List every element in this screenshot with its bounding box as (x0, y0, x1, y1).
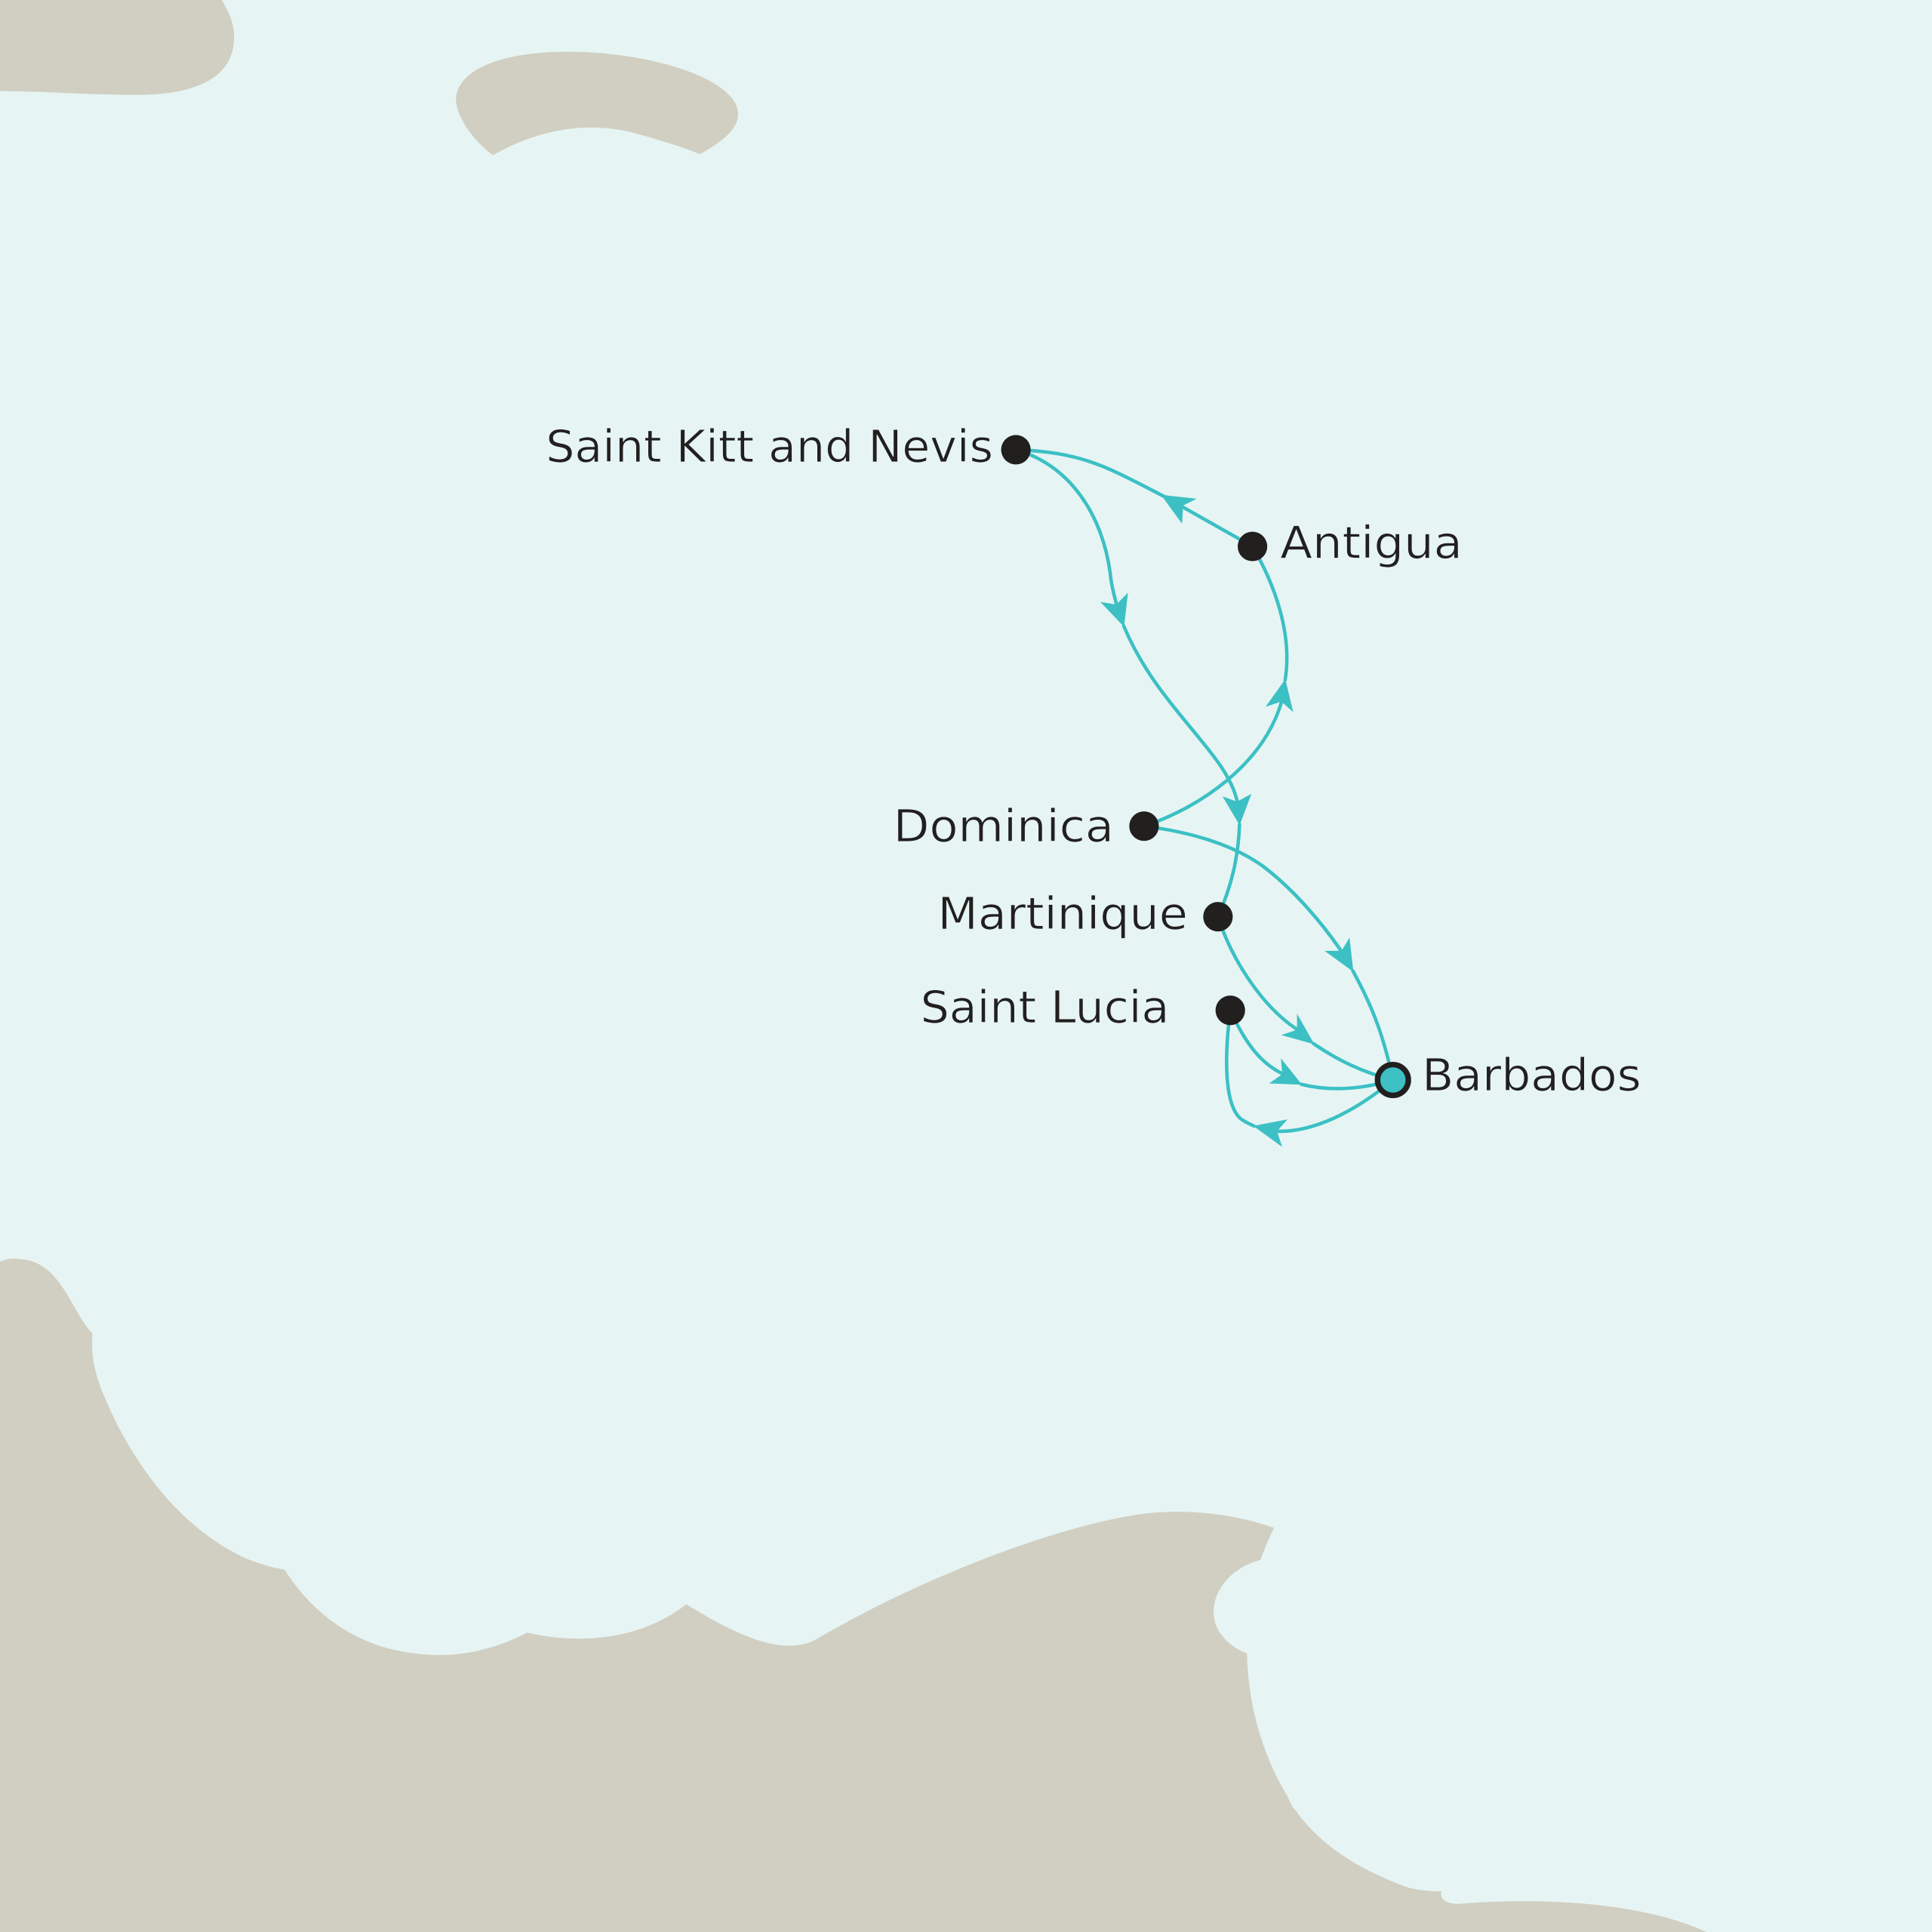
landmass: south coast (0, 1259, 1706, 1932)
route: Antigua to Saint Kitts and Nevis (1016, 450, 1253, 546)
route: Martinique to Barbados (1218, 917, 1393, 1080)
stop: Saint Kitts and Nevis: Saint Kitt and Nevis (546, 420, 993, 472)
route: Barbados to Saint Lucia (1226, 1011, 1393, 1146)
route: Barbados to Dominica (1144, 826, 1393, 1080)
route: Saint Lucia to Barbados (1230, 1011, 1393, 1088)
route: Dominica to Antigua (1144, 546, 1293, 826)
stop: Martinique: Martinique (937, 888, 1188, 940)
stop: Saint Lucia: Saint Lucia (921, 981, 1169, 1033)
stop: Barbados (start and end port): Barbados (1422, 1049, 1641, 1101)
landmass: top island (456, 52, 738, 155)
landmass: top left (0, 0, 234, 95)
stop: Antigua: Antigua (1280, 517, 1463, 569)
stop: Dominica: Dominica (894, 800, 1114, 852)
route: Saint Kitts and Nevis to Martinique (1016, 450, 1251, 917)
